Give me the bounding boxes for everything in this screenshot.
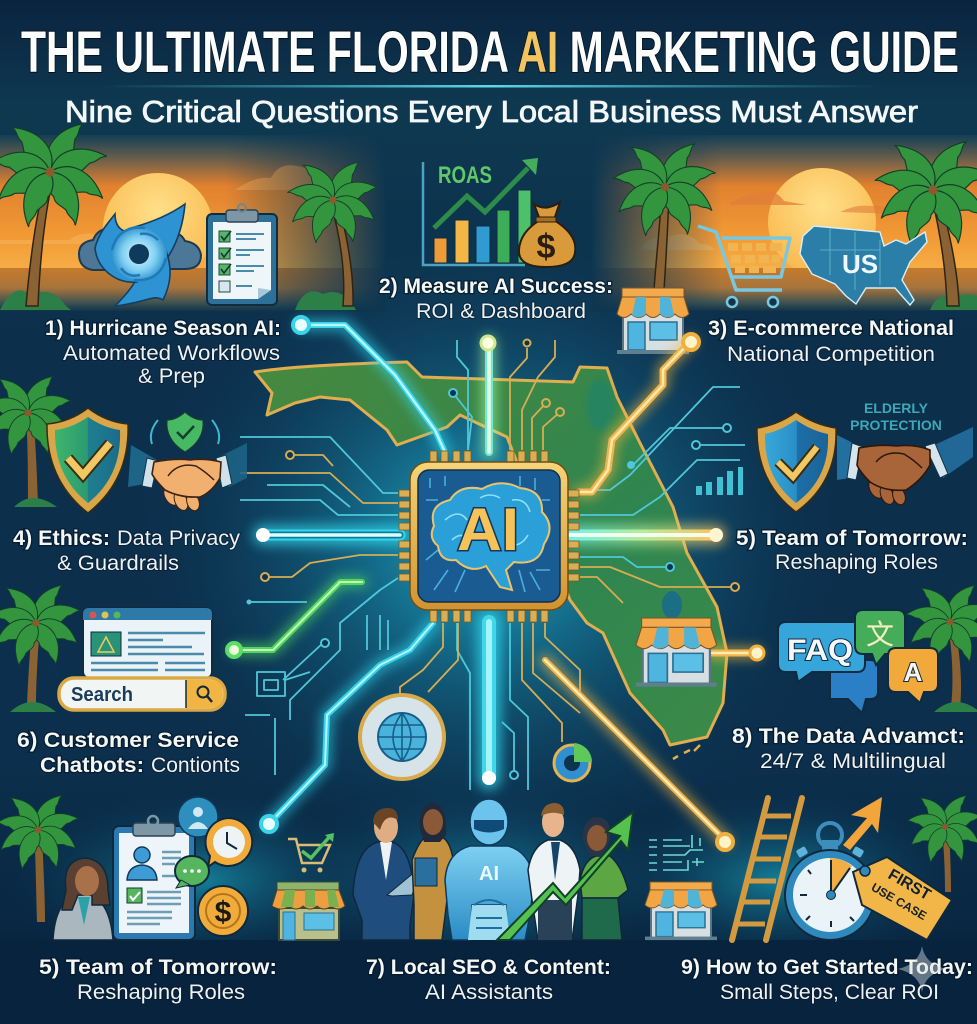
icon: search bar: Search — [71, 684, 133, 706]
subtitle: Nine Critical Questions Every Local Business Must Answer — [65, 94, 918, 129]
AI robot: AI — [479, 863, 499, 885]
divider glow — [100, 85, 880, 88]
AI chip — [399, 451, 579, 622]
FAQ bubble — [778, 622, 865, 682]
icon: US map: US — [842, 249, 878, 279]
palm tree: top right large — [873, 133, 977, 306]
watermark sparkle — [898, 946, 946, 992]
caption: right question 5 — [736, 527, 968, 574]
node — [293, 317, 309, 333]
icon: storefront top — [617, 288, 689, 354]
swirl core — [111, 226, 167, 282]
storm clouds — [79, 229, 201, 270]
caption: question 8 — [732, 725, 965, 773]
chart: mini bars — [696, 467, 743, 495]
icon: blue protection shield — [757, 412, 836, 512]
node — [482, 771, 496, 785]
caption: right question 5: Reshaping Roles — [775, 551, 938, 574]
green bubble — [855, 610, 905, 665]
icon: person badge — [178, 797, 218, 837]
caption: question 3: 3) E-commerce National — [708, 317, 954, 340]
trace: to question 6 — [227, 582, 362, 657]
caption: question 4: & Guardrails — [57, 552, 179, 575]
node — [683, 334, 699, 350]
orange bubble — [888, 648, 938, 703]
hurricane eye — [129, 244, 149, 264]
icon: money bag — [519, 202, 575, 267]
thin circuit traces — [240, 340, 745, 790]
caption: question 2 — [379, 275, 613, 323]
caption: bottom question 5: 5) Team of Tomorrow: — [39, 956, 277, 979]
caption: question 4: Data Privacy — [117, 527, 241, 550]
caption: question 9: Small Steps, Clear ROI — [720, 981, 939, 1004]
panel: bottom scene glow — [0, 780, 970, 980]
palm tree: mid left lower — [0, 578, 83, 712]
caption: right question 5: 5) Team of Tomorrow: — [736, 527, 968, 550]
brain — [432, 483, 550, 590]
chip circuit details — [426, 476, 550, 592]
caption: question 6: 6) Customer Service — [17, 729, 239, 752]
caption: question 3: National Competition — [727, 343, 935, 366]
icon: handshake left — [128, 443, 247, 513]
palm tree: top left large — [0, 115, 110, 306]
caption: question 8: 24/7 & Multilingual — [760, 750, 946, 773]
trace: to question 8 — [712, 646, 764, 660]
node — [227, 643, 241, 657]
icon: storefront green — [272, 882, 345, 940]
chip label: AI — [457, 496, 519, 563]
icon: pie chart — [554, 743, 592, 781]
palm tree: mid right — [905, 578, 977, 712]
trace: to question 9 — [545, 660, 733, 850]
icon: small shield with waves — [151, 412, 219, 452]
icon: chat bubble — [175, 856, 209, 888]
icon: woman portrait — [53, 858, 113, 940]
woman in gold jacket — [412, 803, 454, 940]
palm tree: top right small — [612, 136, 718, 290]
caption: question 9 — [681, 956, 973, 1004]
chart: ROAS growth — [423, 158, 538, 265]
caption: bottom question 5: Reshaping Roles — [77, 981, 245, 1004]
caption: question 6: Chatbots: — [40, 754, 144, 777]
icon: green privacy shield — [47, 408, 128, 513]
caption: question 3 — [708, 317, 954, 366]
text: elderly protection: ELDERLY — [864, 400, 929, 416]
icon: store on map — [636, 618, 717, 687]
caption: question 6 — [17, 729, 240, 777]
sun left — [103, 173, 213, 283]
green growth arrow — [497, 812, 633, 940]
icon: orange arrow — [843, 797, 882, 850]
panel: left sunset scene — [0, 135, 385, 312]
text: elderly protection — [850, 400, 942, 433]
palm tree: bottom left — [0, 789, 81, 922]
palm tree: top left small — [286, 155, 380, 306]
icon: money bag: $ — [537, 228, 556, 266]
caption: question 8: 8) The Data Advamct: — [732, 725, 965, 748]
icon: role clipboard — [113, 816, 195, 940]
sun right — [768, 168, 876, 276]
icon: handshake right — [837, 427, 973, 507]
trace: to question 2 — [481, 336, 495, 452]
icon: dollar coin — [198, 886, 248, 936]
icon: FAQ and translation bubbles: 文 — [866, 619, 894, 650]
icon: first use case tag: FIRST — [885, 866, 934, 904]
icon: FAQ and translation bubbles: FAQ — [787, 634, 853, 667]
node — [717, 834, 733, 850]
trace: to bottom question 5 — [261, 623, 433, 832]
swirl arms — [95, 204, 185, 306]
caption: question 1: 1) Hurricane Season AI: — [45, 317, 281, 340]
palm tree: bottom right — [906, 790, 977, 892]
chart: ROAS growth: ROAS — [438, 162, 492, 189]
caption: question 9: 9) How to Get Started Today: — [681, 956, 973, 979]
icon: hurricane — [79, 204, 201, 306]
icon: US map — [800, 226, 927, 305]
icon: globe badge — [360, 695, 444, 779]
node — [750, 646, 764, 660]
caption: question 7: AI Assistants — [425, 981, 553, 1004]
icon: small cart with check — [288, 833, 334, 872]
woman in green — [580, 817, 628, 940]
second blue bubble — [830, 660, 878, 713]
caption: question 1: Automated Workflows — [63, 342, 280, 365]
caption: question 1: & Prep — [138, 365, 205, 388]
icon: ladder — [732, 798, 802, 940]
node — [481, 336, 495, 350]
caption: question 7 — [366, 956, 611, 1004]
icon: storefront right — [645, 882, 717, 940]
caption: question 1 — [45, 317, 281, 388]
icon: browser window — [83, 608, 212, 678]
icon: FAQ and translation bubbles: A — [904, 657, 923, 687]
caption: bottom question 5 — [39, 956, 277, 1004]
icon: dollar coin: $ — [215, 896, 232, 929]
panel: right sunset scene — [592, 135, 977, 312]
icon: FAQ and translation bubbles — [778, 610, 938, 713]
map: Florida — [255, 362, 727, 759]
trace: to question 3 — [579, 334, 699, 492]
icon: search bar — [59, 678, 225, 710]
caption: question 4: 4) Ethics: — [13, 527, 110, 550]
node — [261, 816, 277, 832]
icon: stopwatch — [785, 823, 875, 940]
man with tablet — [353, 808, 422, 940]
caption: question 7: 7) Local SEO & Content: — [366, 956, 611, 979]
trace: to question 1 — [293, 317, 445, 452]
icon: clock bubble — [205, 818, 252, 867]
icon: first use case tag: USE CASE — [869, 880, 929, 923]
icon: mini circuit diagram — [649, 835, 704, 870]
background: central glow — [129, 210, 849, 870]
bottom caption band — [0, 940, 977, 1024]
people: business team with AI robot — [353, 799, 633, 940]
icon: first use case tag — [853, 857, 952, 940]
text: elderly protection: PROTECTION — [850, 417, 942, 433]
chip pins — [399, 451, 579, 622]
caption: question 6: Contionts — [151, 754, 240, 777]
palm tree: mid left upper — [0, 369, 73, 507]
icon: shopping cart — [698, 226, 790, 307]
man in white shirt — [528, 803, 580, 940]
icon: checklist clipboard — [207, 204, 277, 305]
trace: to right question 5 — [570, 528, 723, 542]
trace: to question 4 — [256, 528, 400, 542]
node — [709, 528, 723, 542]
trace: to question 7 — [482, 622, 496, 785]
caption: question 4 — [13, 527, 241, 575]
caption: question 2: ROI & Dashboard — [416, 300, 586, 323]
AI robot — [445, 799, 534, 940]
node — [256, 528, 270, 542]
caption: question 2: 2) Measure AI Success: — [379, 275, 613, 298]
